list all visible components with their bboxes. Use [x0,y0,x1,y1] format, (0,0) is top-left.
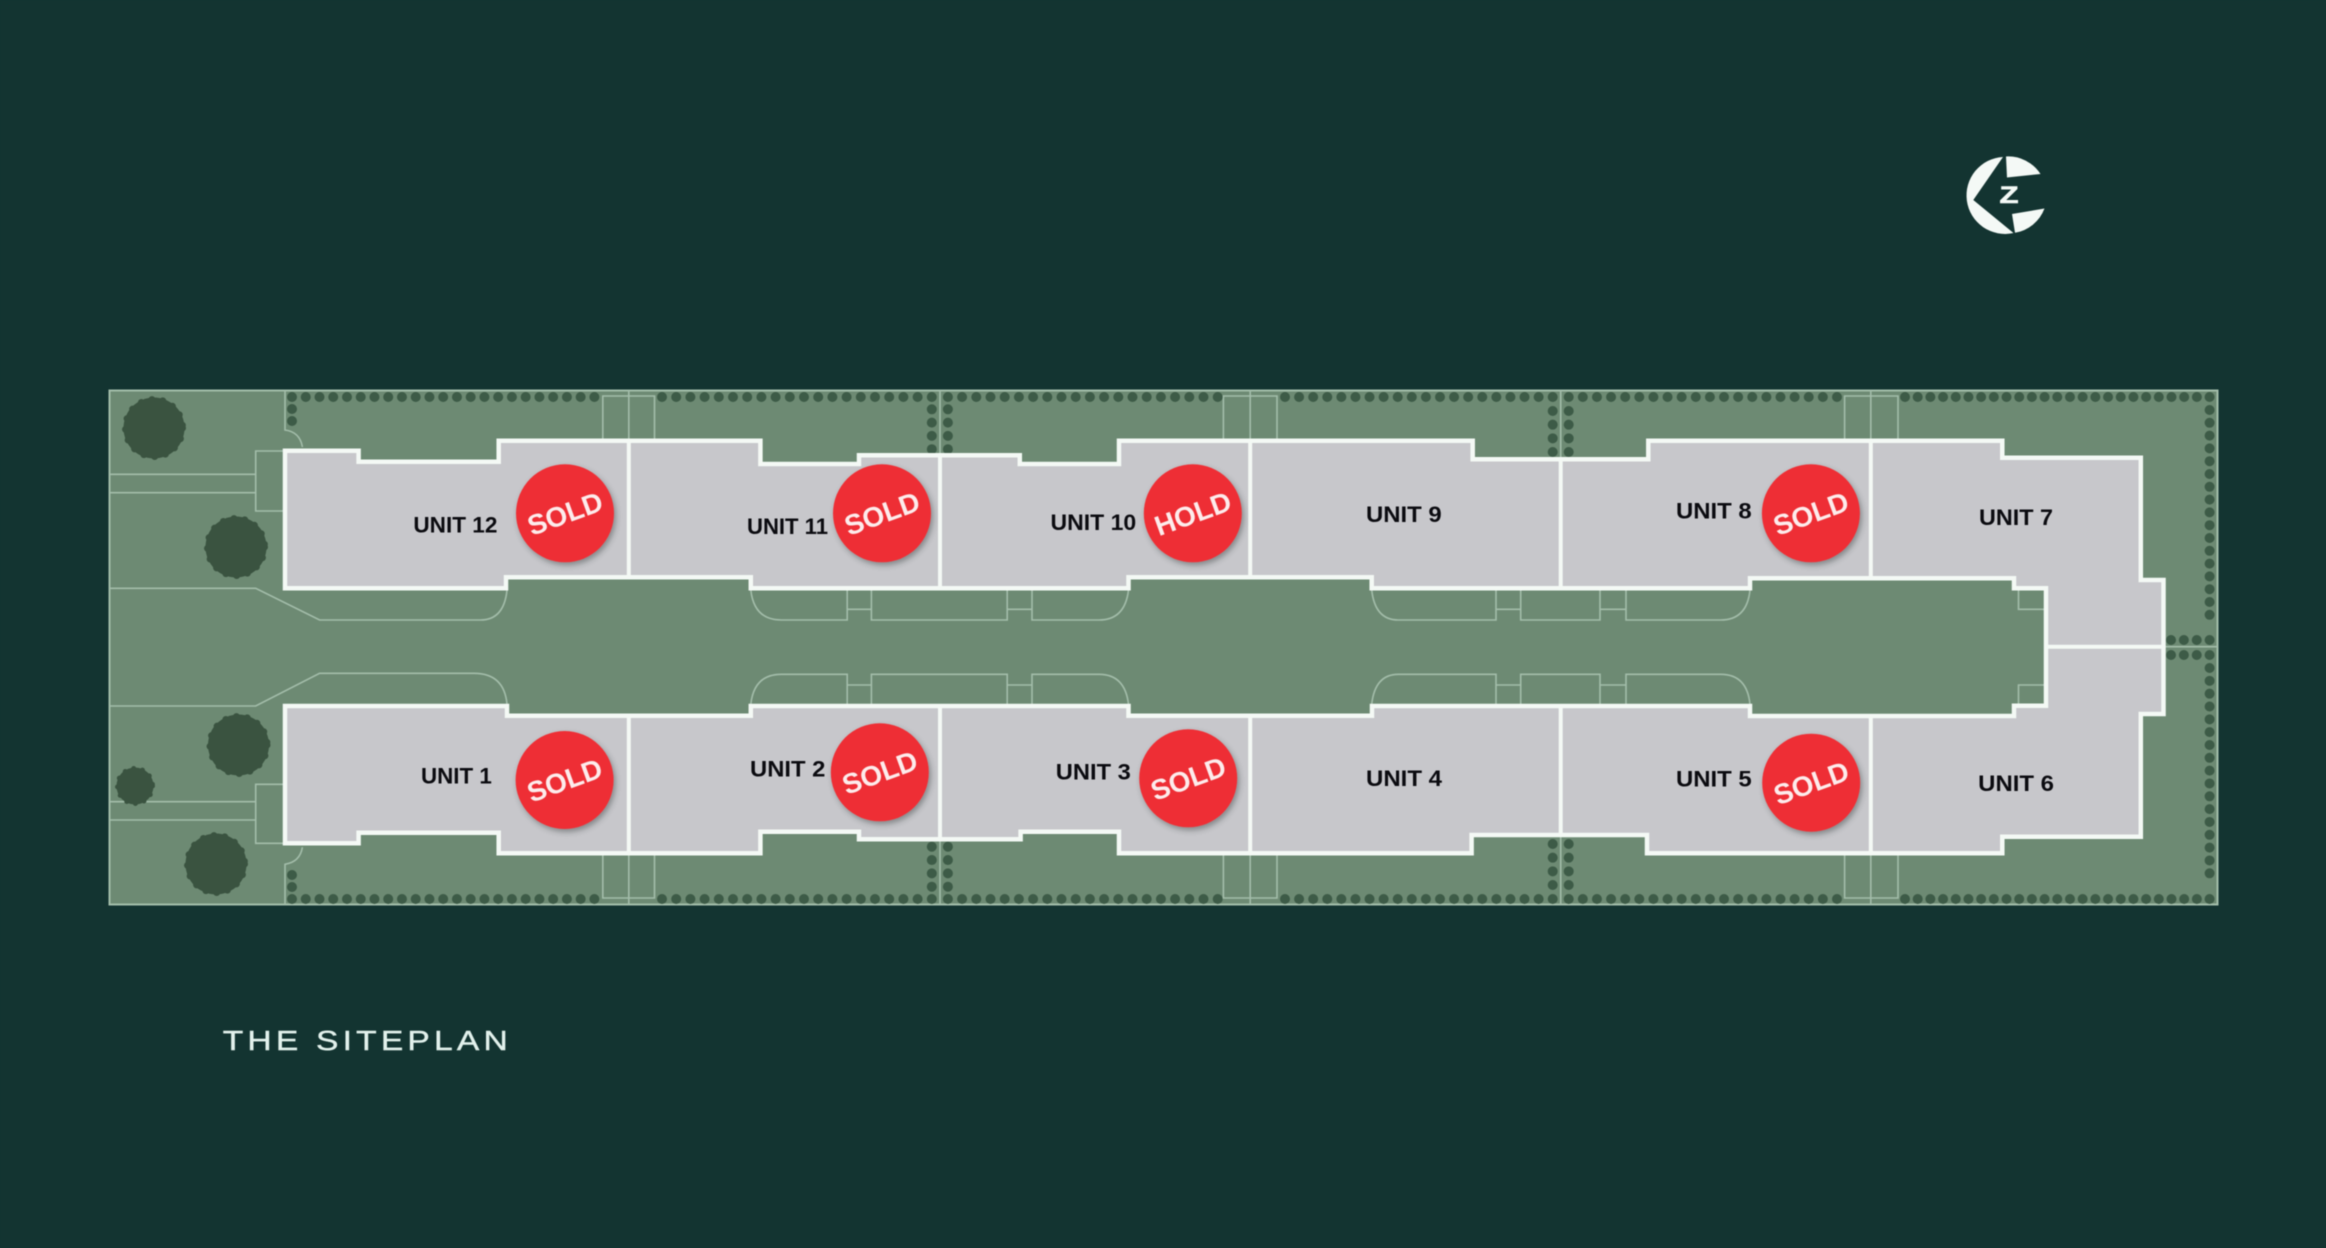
icon: north compass logo: Z [1999,181,2019,208]
badge: unit 2 sold: SOLD [838,745,922,801]
label: unit 10: UNIT 10 [1050,510,1136,535]
tree 3 [208,714,269,776]
badge: unit 5 sold [1762,734,1860,832]
tree 4 [116,768,154,804]
label: unit 2: UNIT 2 [750,757,825,782]
unit dividers [629,441,2163,853]
badge: unit 10 hold [1144,464,1242,562]
badge: unit 5 sold: SOLD [1770,755,1853,811]
badge: unit 12 sold: SOLD [523,486,607,542]
badge: unit 12 sold [516,464,614,562]
badge: unit 11 sold: SOLD [840,486,924,542]
label: unit 3: UNIT 3 [1056,759,1131,784]
tree 1 [124,398,184,458]
badge: unit 3 sold [1139,729,1237,827]
badge: unit 8 sold: SOLD [1769,486,1853,542]
label: unit 11: UNIT 11 [747,514,828,539]
badge: unit 1 sold: SOLD [523,753,607,808]
building footprint [285,441,2164,853]
badge: unit 8 sold [1762,464,1860,562]
badge: unit 3 sold: SOLD [1147,751,1230,807]
label: unit 1: UNIT 1 [421,763,492,788]
trees [116,398,269,894]
hedge dots [292,397,2210,899]
badge: unit 2 sold [831,723,929,821]
title: THE SITEPLAN [223,1025,512,1056]
icon: north compass logo [1967,156,2044,234]
label: unit 5: UNIT 5 [1676,767,1752,792]
badge: unit 1 sold [516,731,614,829]
label: unit 12: UNIT 12 [413,512,497,537]
status badges [516,464,1860,832]
fine site lines: paths, gates and patios [109,390,2218,905]
panel: site plan ground [109,390,2218,905]
badge: unit 11 sold [833,464,931,562]
label: unit 4: UNIT 4 [1366,766,1443,791]
label: unit 7: UNIT 7 [1979,505,2053,530]
label: unit 8: UNIT 8 [1676,498,1752,523]
tree 5 [186,834,246,894]
label: unit 9: UNIT 9 [1366,502,1442,527]
label: unit 6: UNIT 6 [1978,771,2054,796]
badge: unit 10 hold: HOLD [1150,486,1236,542]
unit labels [413,498,2054,796]
tree 2 [206,516,266,578]
